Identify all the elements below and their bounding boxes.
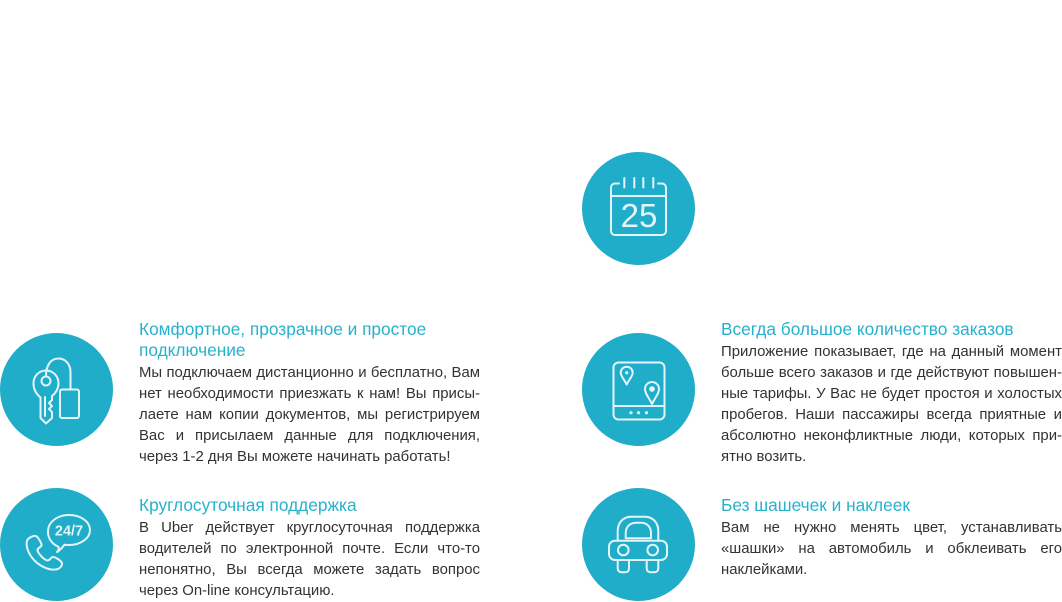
text block: support	[139, 495, 480, 599]
panel: support	[0, 488, 480, 601]
text block: no stickers	[721, 495, 1062, 578]
body: connection: лаете нам копии документов, мы регистрируем	[139, 407, 480, 423]
heading: connection: Комфортное, прозрачное и простое	[139, 319, 426, 339]
body: connection: Мы подключаем дистанционно и бесплатно, Вам	[139, 365, 480, 381]
panel: orders	[582, 319, 1062, 465]
body: support: непонятно, Вы всегда можете задать вопрос	[139, 562, 480, 578]
heading: no stickers: Без шашечек и наклеек	[721, 495, 910, 515]
body: no stickers: «шашки» на автомобиль и обклеивать его	[721, 541, 1062, 557]
heading: orders: Всегда большое количество заказов	[721, 319, 1014, 339]
body: support	[139, 520, 480, 599]
heading: connection: подключение	[139, 340, 246, 360]
panel: no stickers	[582, 488, 1062, 601]
icon: calendar 25	[582, 152, 695, 265]
body: connection: нет необходимости приезжать к нам! Вы присы-	[139, 386, 480, 402]
text block: connection	[139, 319, 480, 465]
body: no stickers: наклейками.	[721, 562, 807, 578]
panel: calendar icon	[582, 152, 695, 265]
text block: orders	[721, 319, 1062, 465]
body: connection	[139, 365, 480, 465]
heading: support: Круглосуточная поддержка	[139, 495, 357, 515]
body: orders: ные тарифы. У Вас не будет простоя и холостых	[721, 386, 1062, 402]
body: orders: ятно возить.	[721, 449, 806, 465]
body: no stickers: Вам не нужно менять цвет, устанавливать	[721, 520, 1062, 536]
icon: car	[582, 488, 695, 601]
body: orders	[721, 344, 1062, 465]
panel: connection	[0, 319, 480, 465]
body: support: водителей по электронной почте. Если что-то	[139, 541, 480, 557]
icon: calendar 25: 25	[621, 197, 657, 234]
heading: connection	[139, 319, 426, 360]
icon: tablet with map pins	[582, 333, 695, 446]
body: orders: абсолютно неконфликтные люди, которых при-	[721, 428, 1062, 444]
icon: phone with 24/7 speech bubble: 24/7	[55, 524, 83, 540]
body: support: В Uber действует круглосуточная поддержка	[139, 520, 480, 536]
body: connection: Вас и присылаем данные для подключения,	[139, 428, 480, 444]
body: orders: больше всего заказов и где действуют повышен-	[721, 365, 1062, 381]
icon: phone with 24/7 speech bubble	[0, 488, 113, 601]
body: support: через On-line консультацию.	[139, 583, 334, 599]
body: orders: пробегов. Наши пассажиры всегда приятные и	[721, 407, 1062, 423]
icon: key and tag	[0, 333, 113, 446]
body: no stickers	[721, 520, 1062, 578]
body: orders: Приложение показывает, где на данный момент	[721, 344, 1062, 360]
body: connection: через 1-2 дня Вы можете начинать работать!	[139, 449, 450, 465]
